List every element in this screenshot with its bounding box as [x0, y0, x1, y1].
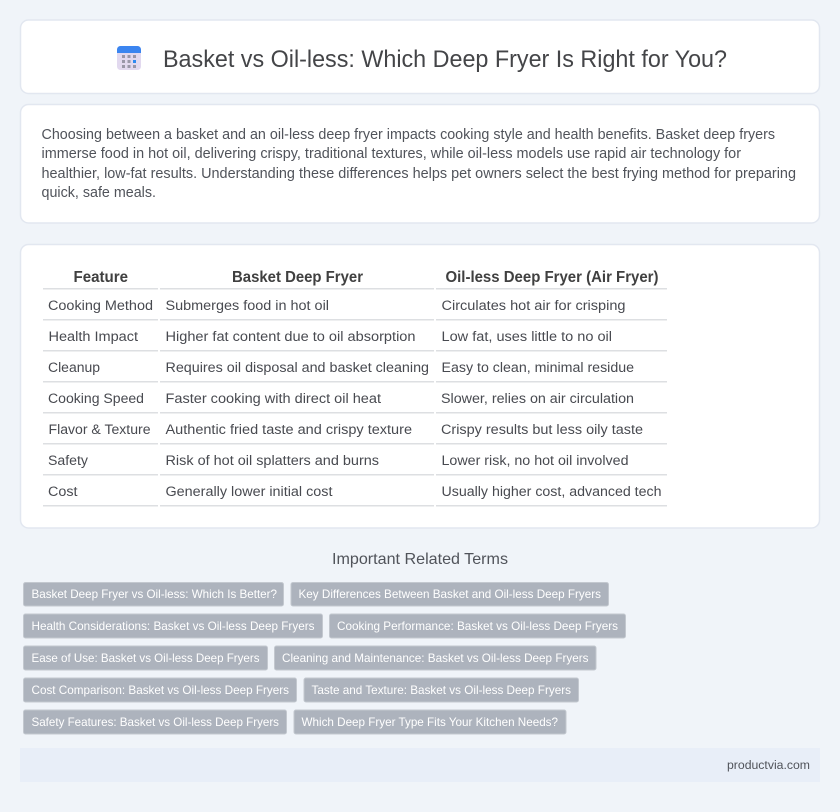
- row: cleanup: Cleanup: [48, 360, 100, 376]
- tag: Ease of Use: Basket vs Oil-less Deep Fryers: [32, 651, 260, 665]
- tag: [24, 614, 322, 638]
- icon: calendar: [117, 46, 141, 70]
- panel: comparison table: [20, 244, 820, 528]
- tag: [24, 678, 296, 702]
- tag: [304, 678, 578, 702]
- table column headers: [74, 269, 658, 286]
- panel: introduction: [20, 104, 820, 223]
- row: health impact: Health Impact: [48, 329, 138, 345]
- tag: [24, 582, 284, 606]
- tag: Cost Comparison: Basket vs Oil-less Deep Fryers: [32, 683, 289, 697]
- row: cooking method: Submerges food in hot oil: [166, 298, 329, 314]
- header panel: [20, 20, 820, 94]
- row: health impact: [48, 329, 612, 345]
- text block: introduction paragraph: quick, safe meals.: [42, 185, 156, 201]
- tag: Basket Deep Fryer vs Oil-less: Which Is Better?: [32, 587, 277, 601]
- tag: Safety Features: Basket vs Oil-less Deep Fryers: [32, 715, 279, 729]
- row: health impact: Low fat, uses little to no oil: [442, 329, 612, 345]
- tag: Health Considerations: Basket vs Oil-less Deep Fryers: [32, 619, 315, 633]
- row: cost: [48, 484, 662, 500]
- table column headers: Oil-less Deep Fryer (Air Fryer): [446, 269, 658, 286]
- table column headers: Basket Deep Fryer: [232, 269, 363, 286]
- row: cost: Generally lower initial cost: [166, 484, 333, 500]
- row: cleanup: Requires oil disposal and basket cleaning: [166, 360, 429, 376]
- text block: introduction paragraph: immerse food in hot oil, delivering crispy, traditional textures, while oil-less models use rapid air technology for: [42, 146, 741, 162]
- text block: introduction paragraph: Choosing between a basket and an oil-less deep fryer impacts cooking style and health benefits. Basket deep fryers: [42, 127, 775, 143]
- row: flavor and texture: [48, 422, 643, 438]
- text block: introduction paragraph: [42, 127, 796, 201]
- tag: Key Differences Between Basket and Oil-less Deep Fryers: [298, 587, 601, 601]
- footer bar: [20, 748, 820, 782]
- tag: Which Deep Fryer Type Fits Your Kitchen Needs?: [302, 715, 558, 729]
- tag: Cleaning and Maintenance: Basket vs Oil-less Deep Fryers: [282, 651, 589, 665]
- row: cost: Cost: [48, 484, 78, 500]
- row: safety: Safety: [48, 453, 89, 469]
- row: flavor and texture: Authentic fried taste and crispy texture: [166, 422, 412, 438]
- row: health impact: Higher fat content due to oil absorption: [166, 329, 416, 345]
- tag: [294, 710, 566, 734]
- table column headers: Feature: [74, 269, 128, 286]
- tag: Taste and Texture: Basket vs Oil-less Deep Fryers: [312, 683, 571, 697]
- text block: introduction paragraph: healthier, low-fat results. Understanding these differences helps pet owners select the best frying method for preparing: [42, 166, 796, 182]
- row: cooking method: Circulates hot air for crisping: [442, 298, 626, 314]
- row: safety: Risk of hot oil splatters and burns: [166, 453, 379, 469]
- row: cooking speed: [48, 391, 634, 407]
- row: safety: [48, 453, 628, 469]
- tag: Cooking Performance: Basket vs Oil-less Deep Fryers: [337, 619, 618, 633]
- related term tags: [24, 582, 626, 734]
- row: cooking speed: Faster cooking with direct oil heat: [166, 391, 381, 407]
- row: flavor and texture: Flavor & Texture: [48, 422, 151, 438]
- tag: [291, 582, 608, 606]
- row: cleanup: Easy to clean, minimal residue: [442, 360, 634, 376]
- row: cooking method: [48, 298, 626, 314]
- row: safety: Lower risk, no hot oil involved: [442, 453, 628, 469]
- row: cleanup: [48, 360, 634, 376]
- row: cooking speed: Cooking Speed: [48, 391, 144, 407]
- title: Basket vs Oil-less: Which Deep Fryer Is Right for You?: [163, 46, 727, 73]
- tag: [274, 646, 596, 670]
- heading: important related terms: Important Related Terms: [332, 551, 508, 568]
- tag: [24, 646, 268, 670]
- row: flavor and texture: Crispy results but less oily taste: [441, 422, 643, 438]
- row: cooking method: Cooking Method: [48, 298, 153, 314]
- footer source text: productvia.com: [727, 758, 810, 772]
- row: cost: Usually higher cost, advanced tech: [442, 484, 662, 500]
- tag: [24, 710, 286, 734]
- row: cooking speed: Slower, relies on air circulation: [441, 391, 634, 407]
- tag: [330, 614, 626, 638]
